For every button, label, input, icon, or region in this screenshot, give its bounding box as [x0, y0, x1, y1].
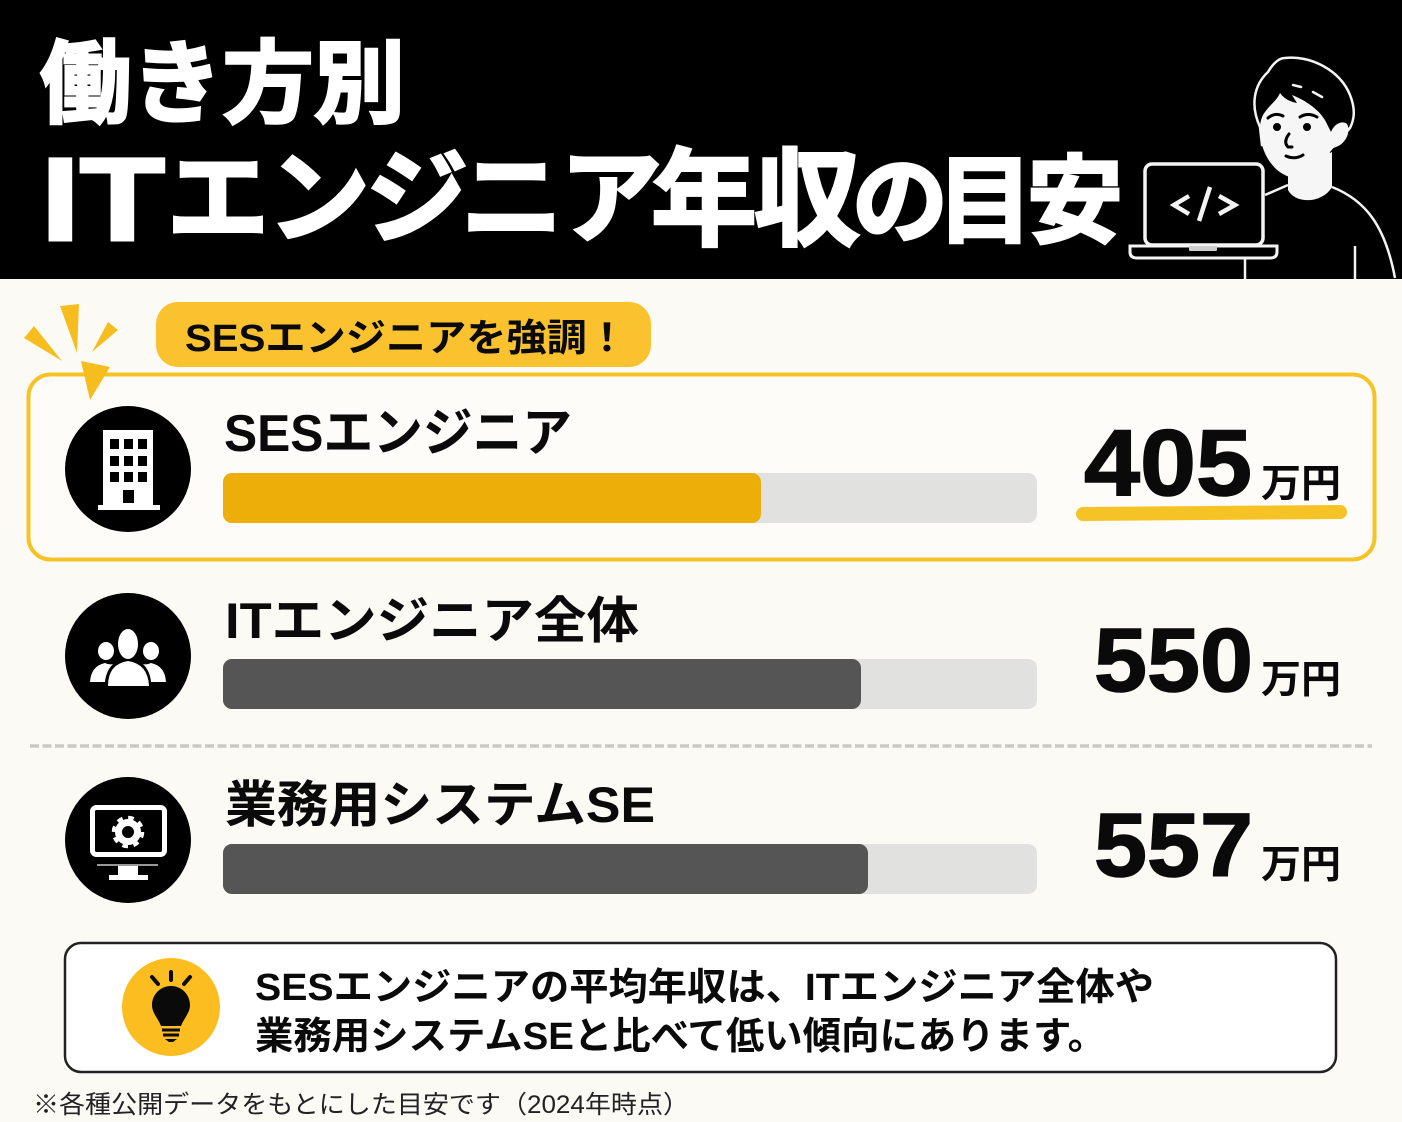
value: 557: 万円 — [1261, 844, 1341, 887]
bar: business system SE — [223, 844, 1037, 894]
label: IT engineers overall: ITエンジニア全体 — [225, 593, 639, 649]
laptop screen — [1145, 164, 1263, 245]
title line 2: の目安 — [852, 149, 1123, 256]
value: 550 — [1094, 611, 1341, 711]
value: 405: 万円 — [1261, 463, 1341, 506]
summary box — [65, 943, 1336, 1072]
summary text: SESエンジニアの平均年収は、ITエンジニア全体や — [255, 967, 1154, 1009]
title line 2: エンジニア — [167, 142, 662, 256]
engineer face — [1260, 93, 1348, 178]
bar: IT engineers overall — [223, 659, 1037, 709]
icon: monitor with gear — [65, 777, 191, 903]
title line 2: IT — [41, 134, 165, 266]
value: 550: 万円 — [1261, 659, 1341, 702]
value: 557: 557 — [1094, 796, 1253, 896]
engineer body — [1245, 185, 1395, 279]
code symbol — [1174, 187, 1235, 221]
value: 405: 405 — [1084, 410, 1252, 515]
value: 557 — [1094, 796, 1341, 896]
callout badge: SESエンジニアを強調！ — [185, 318, 627, 360]
summary text: 業務用システムSEと比べて低い傾向にあります。 — [255, 1016, 1106, 1058]
row: IT engineers overall — [65, 593, 1341, 719]
illustration: engineer with laptop — [1130, 58, 1395, 279]
sparkle accent — [24, 304, 118, 361]
icon: light bulb — [122, 958, 220, 1056]
label: business system SE: 業務用システムSE — [225, 777, 655, 833]
sparkle pointer over box — [81, 361, 110, 400]
engineer facial features — [1268, 114, 1317, 158]
bar: SES engineer — [223, 473, 1037, 523]
row: business system SE — [65, 777, 1341, 903]
summary text — [255, 967, 1154, 1058]
footnote: ※各種公開データをもとにした目安です（2024年時点） — [33, 1091, 689, 1119]
laptop base — [1130, 246, 1277, 258]
callout badge — [156, 302, 651, 367]
icon: group of people — [65, 593, 191, 719]
label: SES engineer: SESエンジニア — [224, 405, 572, 463]
header band — [0, 0, 1402, 279]
title line 2: 年収 — [651, 142, 860, 260]
engineer neck — [1288, 152, 1332, 200]
hair highlights — [1293, 85, 1322, 97]
value: 405 — [1083, 410, 1341, 515]
title line 1: 働き方別 — [40, 35, 405, 135]
highlight box: SES engineer — [28, 361, 1374, 560]
icon: office building — [65, 406, 191, 532]
value: 550: 550 — [1094, 611, 1253, 711]
engineer hair — [1254, 58, 1354, 150]
